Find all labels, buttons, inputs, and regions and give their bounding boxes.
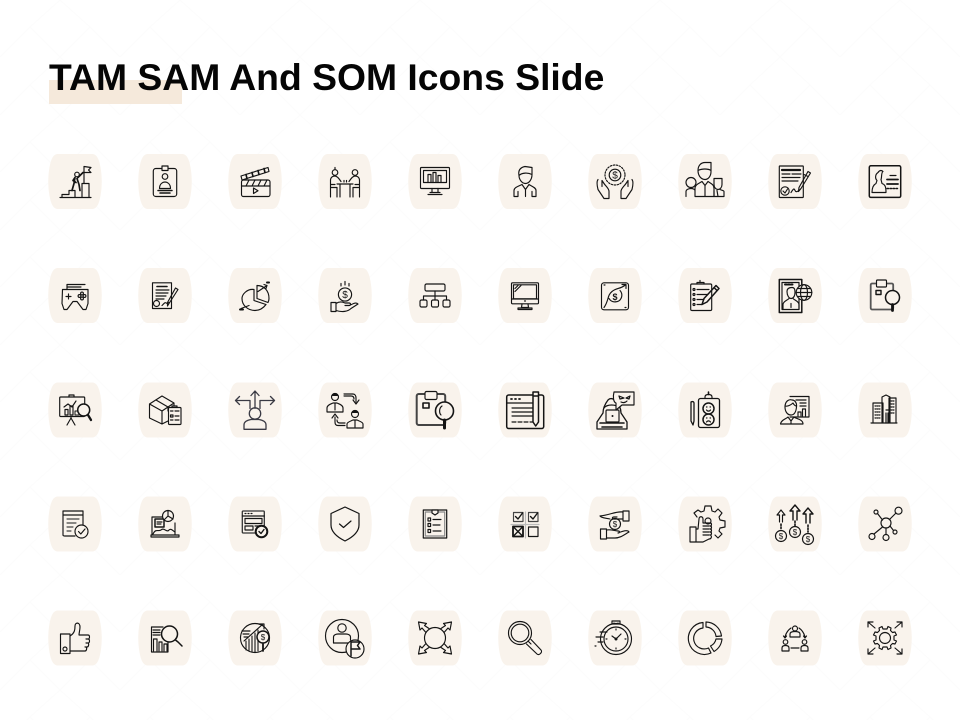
icon: organisation chart — [408, 268, 462, 323]
icon: clipboard checklist with pencil — [678, 268, 732, 323]
icon: checkbox grid — [498, 496, 552, 552]
icon: fast stopwatch — [588, 610, 642, 666]
icon: clipboard list — [408, 496, 462, 552]
icon: rising arrows over coins — [768, 496, 822, 552]
icon: laptop with map and pie — [138, 496, 192, 552]
icon: signed contract with pen — [768, 154, 822, 209]
icon: businessman portrait — [498, 154, 552, 209]
icon: document with checkmark — [48, 496, 102, 552]
icon: dollar growth square: $ — [612, 292, 618, 302]
icon: ID badge — [138, 154, 192, 209]
icon: circle with four outward arrows — [408, 610, 462, 666]
icon: clipboard with magnifier — [858, 268, 912, 323]
icon: network nodes — [858, 496, 912, 552]
icon: pie chart with arrows — [228, 268, 282, 323]
icon: person circle with flag — [318, 610, 372, 666]
icon: presentation board with magnifier — [48, 382, 102, 438]
icon: hands holding dollar coin: $ — [612, 170, 618, 182]
icon: security shield — [318, 496, 372, 552]
icon: film clapperboard — [228, 154, 282, 209]
icon: report with magnifier — [138, 610, 192, 666]
icon: hands exchanging dollar coin: $ — [613, 520, 618, 529]
icon: rising arrows over coins: $ — [793, 528, 798, 537]
icon: team of three people — [678, 154, 732, 209]
icon: dollar growth square — [588, 268, 642, 323]
icon: segmented donut chart — [678, 610, 732, 666]
icon: circular dollar growth chart: $ — [261, 633, 266, 642]
icon: hacker with laptop and speech bubble — [588, 382, 642, 438]
icon: circular dollar growth chart — [228, 610, 282, 666]
icon: monitor with bar chart — [408, 154, 462, 209]
icon: two people exchanging roles — [318, 382, 372, 438]
icon: document with pen signature — [138, 268, 192, 323]
icon: three people connected — [768, 610, 822, 666]
icon: fist with gear — [678, 496, 732, 552]
icon: tablet person with globe — [768, 268, 822, 323]
icon: desktop computer — [498, 268, 552, 323]
icon: analyst with chart — [768, 382, 822, 438]
icon: climber raising flag on steps — [48, 154, 102, 209]
icon: person with three direction arrows — [228, 382, 282, 438]
icon: browser window with pencil — [498, 382, 552, 438]
icon: couple at dinner table — [318, 154, 372, 209]
icon: parcel and delivery list — [138, 382, 192, 438]
icon: hands holding dollar coin — [588, 154, 642, 209]
icon: hands exchanging dollar coin — [588, 496, 642, 552]
icon: profile card — [858, 154, 912, 209]
icon: rising arrows over coins: $ — [779, 532, 784, 541]
icon: magnifying glass — [498, 610, 552, 666]
title highlight bar — [49, 80, 182, 104]
icon: thumbs up — [48, 610, 102, 666]
icon: clipboard with smile and frown faces — [678, 382, 732, 438]
icon: city buildings — [858, 382, 912, 438]
icon: rising arrows over coins: $ — [806, 535, 811, 544]
icon: large clipboard with magnifier — [408, 382, 462, 438]
icon: gear with four outward arrows — [858, 610, 912, 666]
icon: browser window with check — [228, 496, 282, 552]
icon: game controller — [48, 268, 102, 323]
icon: hand receiving dollar coin: $ — [342, 290, 348, 301]
icon: hand receiving dollar coin — [318, 268, 372, 323]
title: TAM SAM And SOM Icons Slide — [49, 56, 604, 98]
